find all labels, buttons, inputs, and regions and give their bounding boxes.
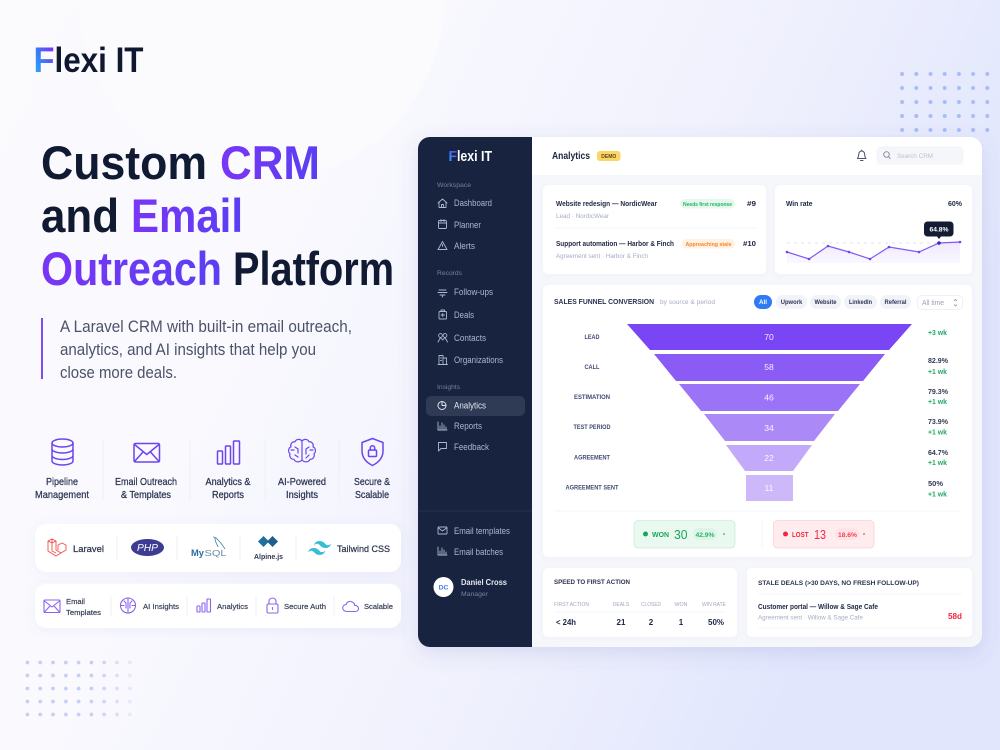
icon: shield — [362, 438, 383, 466]
user profile — [434, 577, 507, 598]
stage: lead: LEAD — [584, 334, 600, 341]
nav group: records: Follow-ups — [454, 287, 494, 297]
icon: brain — [289, 439, 315, 462]
label: Email Templates: Email — [66, 597, 85, 606]
stage: test period: TEST PERIOD — [574, 424, 611, 431]
panel: follow-up list: #9 — [747, 199, 756, 208]
stage: estimation: 46 — [764, 392, 774, 402]
page title: Analytics: DEMO — [601, 154, 616, 160]
icon: email — [44, 600, 60, 612]
stage: call: +1 wk — [928, 369, 947, 376]
stage: agreement: 64.7% — [928, 450, 949, 457]
stage: agreement: 22 — [764, 453, 774, 463]
stage: call: 58 — [764, 362, 774, 372]
nav group: insights: Reports — [454, 421, 483, 431]
table: 50% — [708, 618, 724, 627]
icon: lock — [267, 598, 278, 613]
stage: lead: 70 — [764, 332, 774, 342]
stage: agreement: +1 wk — [928, 460, 947, 467]
funnel chart — [566, 324, 949, 501]
line chart — [786, 241, 961, 263]
stage: estimation: ESTIMATION — [574, 394, 610, 401]
icon: database — [52, 439, 73, 465]
icon: envelope — [134, 444, 160, 462]
won badge: 30 — [674, 527, 688, 542]
dashboard header bar — [532, 137, 982, 175]
intro text block — [41, 318, 352, 382]
table: 2 — [649, 618, 654, 627]
label: Secure Auth: Secure Auth — [284, 602, 326, 611]
intro text block: analytics, and AI insights that help you — [60, 341, 316, 359]
nav group: records: Organizations — [454, 355, 504, 365]
title: Platform — [233, 242, 394, 295]
stage: call — [584, 354, 949, 381]
title: Outreach — [41, 242, 222, 295]
nav group: workspace: Planner — [454, 220, 481, 230]
title: Email — [131, 189, 243, 242]
stage: agreement sent — [566, 475, 947, 501]
icon: cloud — [343, 601, 359, 612]
nav group: workspace: Dashboard — [454, 198, 492, 208]
feature labels: Analytics & — [206, 476, 250, 488]
logo: Laravel — [48, 539, 66, 556]
user profile: DC — [439, 584, 448, 592]
stage: test period: +1 wk — [928, 430, 947, 436]
table: FIRST ACTION — [554, 602, 589, 608]
tooltip: 64.8% — [930, 226, 948, 234]
sidebar logo: F — [448, 149, 457, 165]
logo: MySQL — [191, 537, 227, 558]
stage: estimation — [574, 384, 949, 411]
icon: AI brain — [120, 598, 136, 613]
panel: win rate: Win rate — [786, 199, 812, 208]
nav group: workspace — [437, 182, 492, 251]
title: CRM — [220, 136, 320, 189]
feature row — [35, 438, 390, 501]
feature labels: Pipeline — [46, 476, 78, 488]
stage: agreement sent: 50% — [928, 481, 944, 488]
label: AI Insights: AI Insights — [143, 602, 179, 611]
logo: MySQL: SQL — [204, 548, 227, 558]
label: Laravel: Laravel — [73, 544, 104, 555]
panel: follow-up list: Support automation — Harbor & Finch — [556, 239, 674, 248]
label: Scalable: Scalable — [364, 602, 393, 611]
lost badge: 13 — [814, 527, 826, 542]
source filters: LinkedIn — [849, 299, 872, 306]
table: WON — [674, 602, 688, 608]
stage: lead: +3 wk — [928, 330, 947, 337]
lost badge: LOST — [792, 532, 809, 539]
funnel heading — [554, 297, 715, 306]
panel: follow-up list: Needs first response — [683, 202, 732, 208]
panel: follow-up list: #10 — [743, 239, 756, 248]
stage: agreement sent: +1 wk — [928, 492, 947, 498]
feature labels: Management — [35, 489, 89, 501]
logo: Alpine.js — [254, 536, 283, 561]
table: DEALS — [613, 602, 629, 608]
table: WIN RATE — [702, 602, 726, 608]
page title: Analytics: Analytics — [552, 151, 590, 162]
panel: follow-up list: Approaching stale — [686, 242, 732, 248]
label: Analytics: Analytics — [217, 602, 248, 611]
stage: agreement sent: AGREEMENT SENT — [566, 484, 619, 492]
feature labels: Secure & — [354, 476, 390, 488]
nav group: email: Email batches — [454, 547, 504, 557]
tooltip — [924, 222, 954, 239]
source filters: Website — [814, 299, 837, 306]
table: 1 — [679, 618, 684, 627]
panel: follow-up list: Agreement sent · Harbor & Finch — [556, 253, 648, 260]
stage: estimation: +1 wk — [928, 399, 947, 406]
nav group: insights: Feedback — [454, 442, 490, 452]
icon: bars — [218, 441, 240, 464]
panel: stale deals: Agreement sent · Willow & Sage Cafe — [758, 614, 863, 622]
stage: estimation: 79.3% — [928, 389, 949, 396]
title: and — [41, 189, 119, 242]
stage: lead — [584, 324, 947, 350]
lost badge: 18.6% — [838, 532, 857, 539]
nav group: insights: Insights — [437, 384, 461, 391]
logo: Flexi IT: F — [34, 41, 54, 80]
label: Email Templates: Templates — [66, 608, 101, 617]
source filters: Upwork — [781, 299, 803, 306]
panel: stale deals: 58d — [948, 612, 962, 621]
panel: sales funnel conversion — [543, 285, 972, 557]
sidebar logo: lexi IT — [457, 149, 492, 165]
nav group: records: Contacts — [454, 333, 487, 343]
panel: follow-up list: Website redesign — NordicWear — [556, 199, 657, 208]
source filters: All time — [922, 300, 944, 307]
nav group: workspace: Alerts — [454, 241, 476, 251]
stage: agreement — [574, 445, 949, 471]
panel: stale deals: STALE DEALS (>30 DAYS, NO FRESH FOLLOW-UP) — [758, 580, 919, 587]
logo: Tailwind CSS: Tailwind CSS — [337, 544, 390, 555]
panel: stale deals: Customer portal — Willow & Sage Cafe — [758, 602, 878, 611]
panel: speed to first action — [543, 568, 737, 637]
feature labels — [35, 476, 390, 501]
icon: bell — [858, 150, 866, 160]
nav group: records — [437, 270, 504, 365]
panel: follow-up list: Lead · NordicWear — [556, 213, 610, 220]
table — [554, 602, 726, 627]
panel: win rate — [775, 185, 972, 274]
label: Email Templates — [66, 597, 101, 617]
logo: Flexi IT: lexi IT — [54, 41, 144, 80]
nav group: insights — [426, 384, 525, 452]
nav group: email — [438, 526, 511, 557]
stage: test period: 34 — [764, 423, 774, 433]
logo: Alpine.js: Alpine.js — [254, 552, 283, 561]
logo: Tailwind CSS — [308, 541, 390, 555]
feature labels: & Templates — [121, 489, 171, 501]
stage: agreement: AGREEMENT — [574, 454, 610, 462]
logo: PHP — [131, 539, 164, 556]
user profile: Daniel Cross — [461, 577, 507, 587]
source filters: All — [759, 299, 767, 306]
stage: call: 82.9% — [928, 358, 949, 365]
won badge — [634, 520, 735, 548]
nav group: records: Records — [437, 270, 463, 277]
feature labels: Email Outreach — [115, 476, 177, 488]
source filters: Referral — [884, 299, 907, 306]
stage: test period — [574, 414, 949, 441]
panel: dashboard — [418, 137, 982, 647]
intro text block: close more deals. — [60, 364, 177, 382]
nav group: email: Email templates — [454, 526, 511, 536]
sidebar logo — [449, 150, 492, 161]
panel: product features — [35, 584, 401, 628]
stage: call: CALL — [584, 364, 600, 371]
panel: sidebar — [418, 137, 532, 647]
panel: tech stack logos — [35, 524, 401, 572]
panel: follow-up list — [543, 185, 766, 274]
lost badge — [774, 520, 874, 548]
search box: Search CRM — [897, 153, 933, 160]
user profile: Manager — [461, 591, 489, 598]
feature labels: Scalable — [355, 489, 389, 501]
logo: PHP: PHP — [137, 543, 158, 554]
stage: agreement sent: 11 — [765, 483, 774, 493]
nav group: records: Deals — [454, 310, 475, 320]
won badge: 42.9% — [696, 532, 715, 539]
intro text block: A Laravel CRM with built-in email outreach, — [60, 318, 352, 336]
title — [41, 136, 394, 295]
icon: analytics — [197, 599, 210, 612]
active nav item: analytics: Analytics — [454, 400, 487, 410]
panel: speed to first action: SPEED TO FIRST ACTION — [554, 579, 630, 586]
won badge: WON — [652, 532, 669, 539]
stage: test period: 73.9% — [928, 419, 949, 426]
funnel heading: SALES FUNNEL CONVERSION — [554, 297, 654, 306]
dot grid: top right — [895, 67, 994, 137]
source filters — [754, 295, 962, 310]
funnel heading: by source & period — [660, 299, 715, 306]
nav group: workspace: Workspace — [437, 182, 471, 189]
dot grid: bottom left — [26, 660, 132, 716]
feature labels: AI-Powered — [278, 476, 326, 488]
feature labels: Reports — [212, 489, 244, 501]
logo: MySQL: My — [191, 548, 204, 558]
table: CLOSED — [641, 602, 661, 608]
panel: stale deals — [747, 568, 972, 637]
table: < 24h — [556, 618, 576, 627]
title: Custom — [41, 136, 207, 189]
search box — [877, 147, 963, 164]
table: 21 — [617, 618, 626, 627]
feature labels: Insights — [286, 489, 318, 501]
panel: win rate: 60% — [948, 199, 963, 208]
page title: Analytics — [552, 151, 620, 162]
